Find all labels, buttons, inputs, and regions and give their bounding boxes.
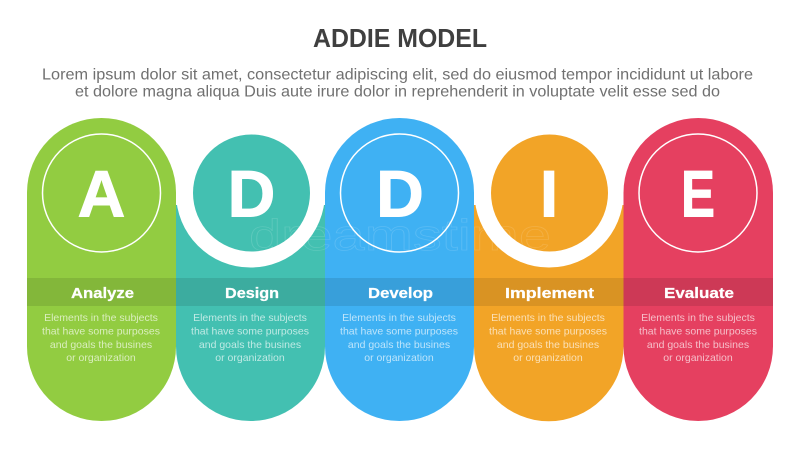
heading: Develop: Develop [368, 286, 433, 302]
panel: Design [176, 118, 325, 421]
description: Develop: and goals the busines [348, 339, 450, 351]
white ring: Design [176, 118, 325, 268]
heading: Implement: Implement [505, 286, 594, 302]
description: Evaluate: or organization [663, 352, 733, 364]
description: Develop: that have some purposes [340, 326, 458, 338]
band: Develop [325, 278, 474, 306]
description: Develop [340, 312, 458, 364]
description: Analyze: and goals the busines [50, 339, 152, 351]
description: Analyze: that have some purposes [42, 326, 160, 338]
description: Implement [489, 312, 607, 364]
capsule: Implement [474, 205, 624, 421]
filled circle: I [491, 134, 608, 252]
description: Develop: or organization [364, 352, 434, 364]
heading: Analyze: Analyze [71, 286, 134, 302]
description: Evaluate: and goals the busines [647, 339, 749, 351]
description: Design: Elements in the subjects [193, 312, 307, 324]
description: Evaluate: Elements in the subjects [641, 312, 755, 324]
capsule: Design [176, 205, 325, 421]
description: Evaluate: that have some purposes [639, 326, 757, 338]
panel: Evaluate [624, 118, 773, 421]
outlined circle: A [42, 134, 160, 252]
band: Analyze [27, 278, 176, 306]
description: Implement: and goals the busines [497, 339, 599, 351]
outlined circle: E [639, 134, 757, 252]
description: Analyze [42, 312, 160, 364]
heading: Evaluate: Evaluate [664, 286, 734, 302]
panel: Analyze [27, 118, 176, 421]
description: Analyze: Elements in the subjects [44, 312, 158, 324]
watermark: dreamstime [249, 211, 551, 260]
panel: Develop [325, 118, 474, 421]
capsule: Evaluate [624, 118, 773, 421]
description: Analyze: or organization [66, 352, 136, 364]
letter D: D [228, 156, 275, 230]
capsule: Develop [325, 118, 474, 421]
letter E: E [681, 156, 715, 230]
filled circle: D [193, 134, 310, 252]
description: Implement: or organization [513, 352, 583, 364]
intro text: et dolore magna aliqua Duis aute irure dolor in reprehenderit in voluptate velit esse sed do [75, 84, 720, 100]
intro text: Lorem ipsum dolor sit amet, consectetur adipiscing elit, sed do eiusmod tempor incididunt ut labore [42, 66, 753, 84]
description: Evaluate [639, 312, 757, 364]
letter D: D [376, 156, 424, 230]
outlined circle: D [340, 134, 458, 252]
letter A: A [78, 156, 125, 230]
description: Design: that have some purposes [191, 326, 309, 338]
description: Design: and goals the busines [199, 339, 301, 351]
panel: Implement [474, 118, 624, 421]
description: Design: or organization [215, 352, 285, 364]
capsule: Analyze [27, 118, 176, 421]
description: Design [191, 312, 309, 364]
band: Evaluate [624, 278, 773, 306]
heading: Design: Design [225, 286, 279, 302]
intro text [42, 66, 753, 100]
description: Develop: Elements in the subjects [342, 312, 456, 324]
band: Implement [474, 278, 624, 306]
band: Design [176, 278, 325, 306]
description: Implement: that have some purposes [489, 326, 607, 338]
title: ADDIE MODEL [313, 23, 487, 53]
description: Implement: Elements in the subjects [491, 312, 605, 324]
letter I: I [540, 156, 558, 230]
white ring: Implement [474, 118, 624, 268]
